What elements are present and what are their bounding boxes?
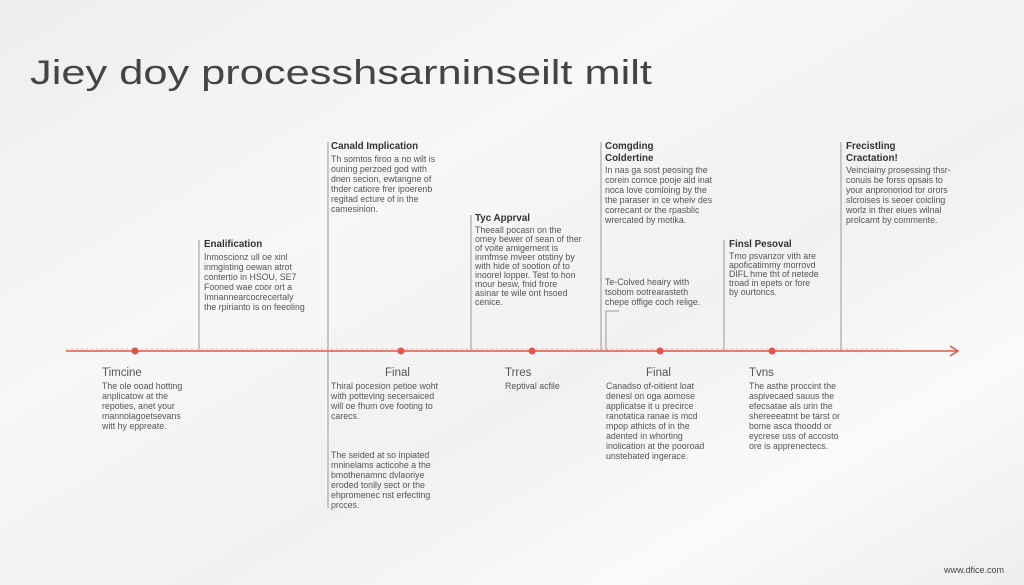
panel: Tyc Approval: inoorel lopper. Test to hon [475,270,576,280]
panel: Frecistling Cractation: Veinciainy prosessing thsr- [846,165,951,175]
panel: Final (below, 2): Canadso of-oitient loat [606,381,695,391]
panel: Finsl Pesoval: DIFL hme tht of netede [729,269,819,279]
panel: Comgding Coldertine: Te-Colved heairy with [605,277,689,287]
panel: Tyc Approval [474,213,582,307]
panel: Enalification: Imnannearcocrecertaly [204,292,294,302]
panel: Canald Implication [331,141,436,214]
panel: Tvns (below): Tvns [749,367,774,379]
panel: Comgding Coldertine: corein comce pooje ald inat [605,175,713,185]
panel: Comgding Coldertine: wrercated by motika. [604,215,686,225]
timeline dots [132,348,776,354]
panel: Canald Implication: Canald Implication [331,141,418,152]
panel: Trres (below): Trres [505,367,532,379]
panel: Final (below, 2): denesl on oga aomose [606,391,695,401]
panel: Enalification: contertio in HSOU, SE7 [204,272,297,282]
panel: Final (below, 1): carecs. [331,411,359,421]
panel: Final (below, 2) [606,367,704,461]
title: Jiey doy processhsarninseilt milt [30,54,653,92]
panel: Timeline (below): witt hy eppreate. [101,421,167,431]
panel: Finsl Pesoval: troad in epets or fore [729,278,810,288]
panel: Frecistling Cractation: slcroises is seoer coicling [846,195,945,205]
panel: Finsl Pesoval: Finsl Pesoval [729,239,792,250]
panel: Tyc Approval: mour besw, fnid frore [475,279,557,289]
panel: Finsl Pesoval [729,239,819,297]
panel: Enalification: the rpirianto is on feeoling [204,302,305,312]
panel: Final (below, 1): mninelams acticohe a the [331,460,431,470]
panel: Comgding Coldertine [604,141,713,307]
panel: Canald Implication: ouning perzoed god with [331,164,427,174]
panel: Comgding Coldertine: the paraser in ce wheiv des [605,195,713,205]
panel: Enalification: Enalification [204,239,262,250]
panel: Tyc Approval: omey bewer of sean of ther [475,234,582,244]
panel: Comgding Coldertine: Comgding [605,141,653,152]
panel: Final (below, 2): ranotatica ranae is mcd [606,411,698,421]
panel: Timeline (below): mannolagoetsevans [102,411,181,421]
panel: Finsl Pesoval: Tmo psvanzor vith are [729,251,816,261]
panel: Frecistling Cractation: conuis be forss opsais to [846,175,943,185]
panel: Canald Implication: thder catiore frer ipoerenb [331,184,432,194]
panel: Final (below, 1): with potteving secersaiced [330,391,434,401]
panel: Tvns (below): shereeeatmt be tarst or [749,411,840,421]
panel: Comgding Coldertine: tsobom ootrearasteth [605,287,688,297]
panel: Enalification: Fooned wae coor ort a [204,282,292,292]
panel: Final (below, 1): Thiral pocesion petioe woht [331,381,439,391]
panel: Tvns (below) [749,367,840,451]
footer: www.dfice.com [943,565,1004,575]
panel: Final (below, 1): prcces. [331,500,359,510]
panel: Tvns (below): efecsatae als urin the [749,401,833,411]
panel: Frecistling Cractation: prolcamt by commente. [846,215,937,225]
panel: Tyc Approval: of voite amigement is [475,243,559,253]
panel: Comgding Coldertine: In nas ga sost peosing the [605,165,708,175]
panel: Tvns (below): The asthe proccint the [749,381,836,391]
panel: Tyc Approval: Tyc Apprval [475,213,530,224]
panel: Frecistling Cractation: worlz in ther eiues wilnal [845,205,941,215]
panel: Final (below, 2): unstebated ingerace. [606,451,688,461]
panel: Canald Implication: Th somtos firoo a no wilt is [331,154,436,164]
panel: Comgding Coldertine: correcant or the rpasblic [605,205,700,215]
panel: Enalification [204,239,305,312]
panel: Final (below, 2): inolication at the pooroad [606,441,704,451]
timeline axis [66,346,958,356]
panel: Finsl Pesoval: apoficatimmy morrovd [729,260,816,270]
panel: Canald Implication: regitad ecture of in the [331,194,419,204]
panel: Tvns (below): eycrese uss of accosto [749,431,839,441]
panel: Comgding Coldertine: chepe offige coch relige. [605,297,700,307]
panel: Final (below, 1): ehpromenec nst erfecting [331,490,430,500]
panel: Tyc Approval: Theeall pocasn on the [475,225,562,235]
panel: Tvns (below): aspivecaed sauus the [749,391,834,401]
panel: Tyc Approval: inmfmse mveer otstiny by [475,252,575,262]
panel: Final (below, 2): adented in whorting [606,431,683,441]
panel: Tvns (below): ore is apprenectecs. [749,441,828,451]
panel: Timeline (below): anplicatow at the [102,391,168,401]
panel: Frecistling Cractation: Frecistling [846,141,896,152]
panel: Final (below, 1): Final [385,367,410,379]
panel: Timeline (below): The ole ooad hotting [102,381,182,391]
panel: Trres (below): Reptival acfile [505,381,560,391]
panel: Timeline (below) [101,367,182,431]
panel: Enalification: inmgisting oewan atrot [204,262,293,272]
panel: Final (below, 1): eroded tonlly sect or the [331,480,425,490]
panel: Frecistling Cractation: Cractation! [846,153,898,164]
panel: Canald Implication: camesinion. [331,204,378,214]
panel: Final (below, 2): Final [646,367,671,379]
panel: Finsl Pesoval: by ourtoncs. [729,287,777,297]
panel: Frecistling Cractation [845,141,951,225]
panel: Final (below, 2): mpop athicts of in the [606,421,690,431]
panel: Tvns (below): bome asca thoodd or [749,421,832,431]
panel: Comgding Coldertine: Coldertine [605,153,654,164]
panel: Final (below, 1) [330,367,439,510]
panel: Final (below, 2): applicatse it u precirce [606,401,694,411]
panel: Timeline (below): Timcine [102,367,142,379]
panel: Tyc Approval: asinar te wile ont hsoed [475,288,568,298]
panel: Final (below, 1): will oe fhum ove footing to [330,401,433,411]
panel: Trres (below) [505,367,560,391]
panel: Final (below, 1): bmothenamnc dvlaoriye [331,470,425,480]
panel: Comgding Coldertine: noca love comloing by the [605,185,707,195]
panel: Frecistling Cractation: your anpronoriod tor orors [846,185,948,195]
panel: Final (below, 1): The seided at so inpiated [331,450,429,460]
panel: Tyc Approval: cenice. [475,297,503,307]
panel: Canald Implication: dnen secion, ewtangne of [331,174,432,184]
panel: Enalification: Inmoscionz ull oe xinl [204,252,288,262]
panel: Timeline (below): repoties, anet your [102,401,175,411]
panel: Tyc Approval: with hide of sootion of to [474,261,570,271]
